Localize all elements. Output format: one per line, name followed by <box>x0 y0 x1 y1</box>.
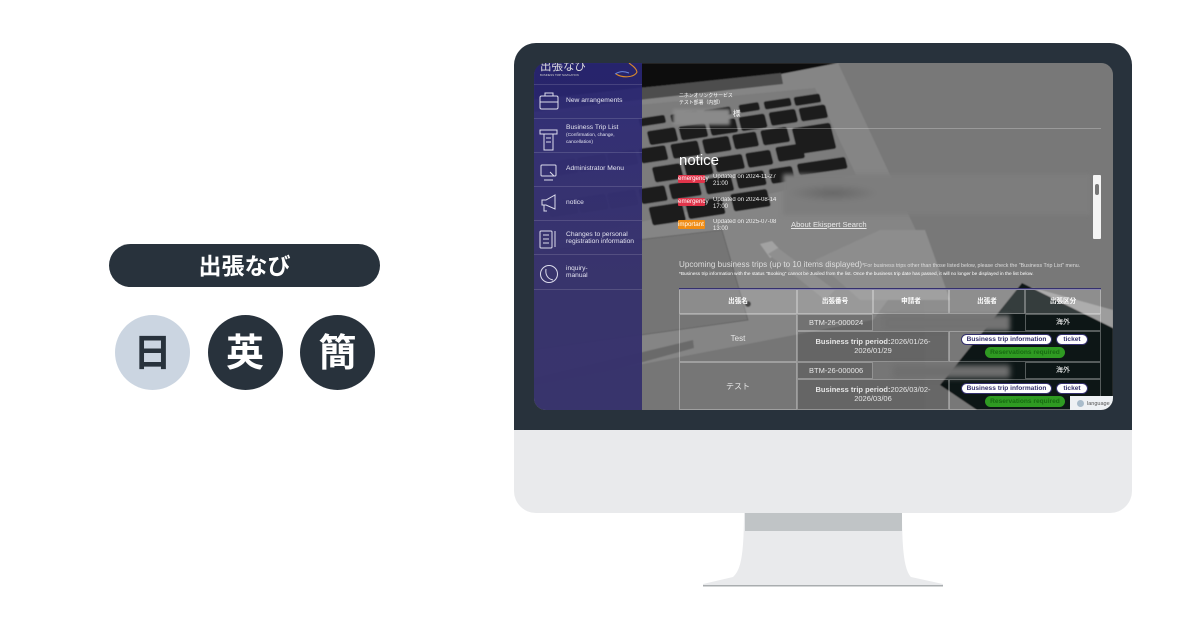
menu label <box>566 231 634 245</box>
reservation status: Reservations required <box>990 398 1060 405</box>
update date <box>713 218 776 232</box>
menu label: inquiry- <box>566 265 588 272</box>
update date <box>713 196 776 210</box>
menu icons <box>540 92 558 283</box>
trip name cell: Test <box>731 334 745 343</box>
header cell <box>679 289 797 314</box>
menu label: registration information <box>566 238 634 245</box>
redacted names <box>893 365 1010 378</box>
header cell <box>949 289 1025 314</box>
divider <box>679 128 1101 129</box>
update date: 13:00 <box>713 226 728 232</box>
trip info button <box>961 383 1052 394</box>
update date: 17:00 <box>713 204 728 210</box>
menu label: manual <box>566 272 588 279</box>
notice list <box>678 174 776 232</box>
section note: *Business trip information with the status "Booking" cannot be Jusiled from the list. Once the business trip date has passed, it will no longer be displayed in the list below. <box>679 272 1034 277</box>
tag: emergency: emergency <box>678 175 709 182</box>
badge: product name: 出張なび <box>198 253 290 279</box>
trip period cell <box>797 379 949 410</box>
table top rule <box>679 288 1101 290</box>
menu label: notice <box>566 199 584 206</box>
tag: emergency: emergency <box>678 198 709 205</box>
ticket button <box>1056 334 1088 345</box>
update date: Updated on 2024-08-14 <box>713 196 776 202</box>
header cell: 申請者 <box>901 298 921 305</box>
trip number cell: BTM-26-000024 <box>809 318 863 327</box>
header cell: 出張区分 <box>1050 298 1076 305</box>
update date <box>713 174 776 186</box>
ticket button <box>1056 383 1088 394</box>
language: Chinese <box>300 315 375 390</box>
header cell <box>873 289 949 314</box>
language: Japanese: 日 <box>133 333 172 375</box>
language button: language <box>1087 401 1110 407</box>
trip number cell <box>797 362 873 379</box>
honorific: 様 <box>733 109 740 118</box>
redacted names <box>883 315 1010 331</box>
company and user <box>671 92 740 127</box>
trip period cell: Business trip period:2026/01/26-2026/01/29 <box>815 337 931 355</box>
language selector <box>115 315 375 390</box>
ticket button: ticket <box>1063 336 1081 343</box>
screen: business trip portal <box>534 63 1113 410</box>
menu label: Business Trip List <box>566 124 618 131</box>
trip period cell <box>797 331 949 362</box>
reservation status <box>985 347 1065 358</box>
action cell <box>949 331 1101 362</box>
header cell <box>1025 289 1101 314</box>
menu label <box>566 265 588 279</box>
language button <box>1070 396 1113 410</box>
notice scrollbar <box>1093 175 1101 239</box>
ticket button: ticket <box>1063 385 1081 392</box>
logo tagline: BUSINESS TRIP NAVIGATION <box>540 73 579 77</box>
trip info button <box>961 334 1052 345</box>
company name: テスト部署（内部） <box>679 101 723 106</box>
redacted user name <box>673 109 730 125</box>
update date: Updated on 2024-11-27 <box>713 174 776 180</box>
trip type cell: 海外 <box>1056 367 1070 374</box>
menu sublabel: (Confirmation, change, <box>566 133 615 138</box>
trip type cell <box>1025 362 1101 379</box>
menu label: New arrangements <box>566 97 622 104</box>
company name: 二ホンオリンクサービス <box>679 94 733 99</box>
globe icon <box>1077 400 1084 407</box>
company name <box>679 92 733 106</box>
reservation status <box>985 396 1065 407</box>
heading: notice: notice <box>679 152 719 169</box>
tag: important: important <box>678 221 704 228</box>
menu label: Administrator Menu <box>566 165 624 172</box>
sidebar navigation <box>534 63 642 410</box>
language: English <box>208 315 282 390</box>
trips table <box>679 288 1101 410</box>
update date: Updated on 2025-07-08 <box>713 218 776 224</box>
menu sublabel: cancellation) <box>566 140 593 144</box>
screen background photo: laptop and notebook <box>534 63 1113 410</box>
language: English: 英 <box>226 333 264 375</box>
header cell: 出張番号 <box>822 298 848 305</box>
trip name cell <box>679 314 797 362</box>
scrollbar thumb <box>1095 184 1099 195</box>
badge: product name <box>109 244 380 287</box>
action cell <box>949 379 1101 410</box>
header cell: 出張者 <box>977 298 997 305</box>
trip type cell: 海外 <box>1056 319 1070 326</box>
trip number cell: BTM-26-000006 <box>809 366 863 375</box>
trip period cell: Business trip period:2026/03/02-2026/03/06 <box>815 385 931 403</box>
trip type cell <box>1025 314 1101 331</box>
reservation status: Reservations required <box>990 349 1060 356</box>
trip info button: Business trip information <box>967 336 1046 343</box>
menu sublabel <box>566 132 615 144</box>
language: Chinese: 簡 <box>318 333 356 375</box>
trip info button: Business trip information <box>967 385 1046 392</box>
header cell: 出張名 <box>728 298 748 305</box>
logo mark <box>614 63 638 78</box>
update date: 21:00 <box>713 180 728 186</box>
trip name cell <box>679 362 797 410</box>
trip number cell <box>797 314 873 331</box>
language: Japanese <box>115 315 190 390</box>
header cell <box>797 289 873 314</box>
redacted notice text <box>783 174 1091 215</box>
monitor illustration <box>514 43 1132 586</box>
link: About Ekispert Search <box>791 220 867 229</box>
section heading: upcoming trips: Upcoming business trips (up to 10 items displayed)*For business trips other than those listed below, please check the "Business Trip List" menu. <box>679 260 1080 269</box>
menu label: Changes to personal <box>566 231 628 238</box>
monitor hardware <box>514 43 1132 586</box>
trip name cell: テスト <box>726 382 750 391</box>
